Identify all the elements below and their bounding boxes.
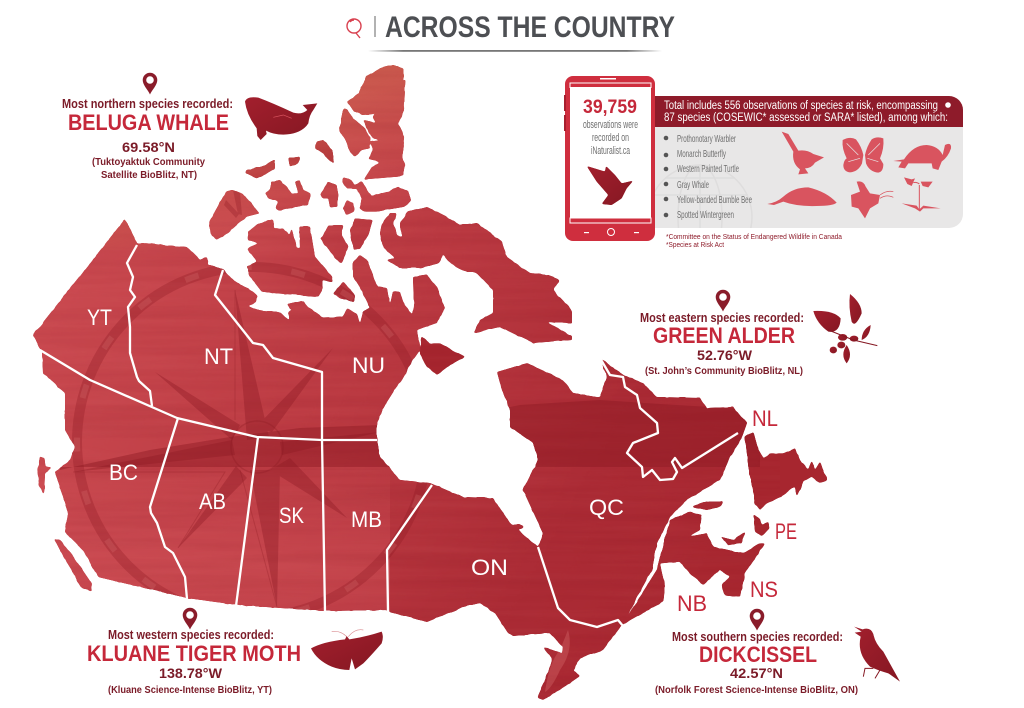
panel: species at risk: [655, 96, 963, 228]
callout: most southern species: DICKCISSEL: [699, 642, 817, 667]
province labels: [87, 305, 797, 616]
province labels: SK: [279, 503, 304, 528]
icon: location pin: [183, 608, 197, 630]
icon: bumble bee: [851, 181, 893, 218]
callout: most eastern species: (St. John’s Community BioBlitz, NL): [645, 366, 803, 377]
callout: most northern species: [62, 73, 317, 181]
callout: most eastern species: Most eastern species recorded:: [640, 310, 804, 325]
icon: monarch butterfly: [842, 137, 884, 173]
title: [347, 11, 675, 52]
province labels: ON: [471, 555, 508, 580]
callout: most northern species: BELUGA WHALE: [68, 110, 229, 135]
map of Canada: [0, 60, 827, 700]
footnotes: [666, 234, 842, 249]
callout: most southern species: [655, 609, 900, 696]
icon: turtle: [893, 144, 951, 170]
callout: most western species: [87, 608, 383, 696]
panel: phone: 39,759: [583, 97, 637, 118]
icon: warbler: [782, 132, 824, 174]
species icons: [767, 132, 951, 218]
callout: most northern species: Satellite BioBlitz, NT): [101, 170, 197, 181]
title: ACROSS THE COUNTRY: [385, 11, 675, 44]
icon: beluga whale: [245, 97, 317, 140]
globe watermark: [655, 164, 752, 228]
icon: location pin: [716, 290, 730, 312]
icon: green alder branch: [813, 294, 877, 363]
panel: phone: iNaturalist.ca: [591, 145, 631, 157]
province labels: AB: [199, 489, 226, 514]
species list: Prothonotary Warbler: [677, 133, 736, 145]
icon: wintergreen: [902, 177, 941, 212]
province labels: YT: [87, 305, 112, 330]
icon: location pin: [750, 609, 764, 630]
panel: phone: recorded on: [592, 132, 629, 144]
footnotes: *Committee on the Status of Endangered Wildlife in Canada: [666, 234, 842, 241]
lake in Baffin Island: [461, 283, 475, 301]
province labels: NT: [204, 344, 233, 369]
header bar: [655, 96, 963, 127]
panel: species at risk: Total includes 556 observations of species at risk, encompassing: [664, 100, 938, 112]
callout: most northern species: (Tuktoyaktuk Community: [92, 157, 205, 168]
callout: most northern species: Most northern species recorded:: [62, 96, 233, 111]
species list: Monarch Butterfly: [677, 148, 726, 160]
species list: Western Painted Turtle: [677, 163, 739, 175]
callout: most southern species: Most southern species recorded:: [672, 629, 843, 644]
compass ring: [77, 267, 427, 617]
province labels: NS: [750, 577, 778, 602]
icon: gray whale: [767, 187, 837, 206]
species list: Yellow-banded Bumble Bee: [677, 194, 752, 206]
Banks Island shading: [224, 190, 242, 218]
footnotes: *Species at Risk Act: [666, 242, 724, 249]
callout: most eastern species: [640, 290, 877, 377]
province labels: NU: [352, 353, 385, 378]
species list: Spotted Wintergreen: [677, 209, 734, 221]
callout: most eastern species: GREEN ALDER: [653, 323, 795, 348]
panel: phone: [564, 76, 655, 241]
species list: [664, 133, 752, 221]
icon: dickcissel bird: [854, 627, 900, 682]
icon: bird: [587, 166, 633, 205]
icon: tiger moth: [311, 630, 383, 670]
callout: most western species: KLUANE TIGER MOTH: [87, 641, 301, 666]
callout: most northern species: 69.58°N: [122, 139, 175, 155]
compass star: [73, 290, 380, 607]
province labels: MB: [351, 507, 382, 532]
callout: most western species: Most western species recorded:: [108, 627, 274, 642]
province labels: QC: [589, 495, 624, 520]
callout: most eastern species: 52.76°W: [697, 347, 753, 363]
province labels: PE: [775, 519, 797, 544]
icon: magnifier logo: [347, 19, 361, 38]
panel: species at risk: 87 species (COSEWIC* assessed or SARA* listed), among which:: [664, 112, 948, 124]
callout: most southern species: (Norfolk Forest Science-Intense BioBlitz, ON): [655, 685, 858, 696]
callout: most western species: (Kluane Science-Intense BioBlitz, YT): [108, 685, 272, 696]
provincial borders: [40, 245, 738, 627]
compass and horizon photo texture: [0, 60, 780, 692]
province labels: NB: [677, 591, 707, 616]
species list: Gray Whale: [677, 179, 709, 191]
province labels: NL: [752, 406, 778, 431]
icon: location pin: [143, 73, 157, 94]
callout: most southern species: 42.57°N: [730, 665, 783, 681]
Southern Ontario highlight: [545, 630, 570, 692]
panel: phone: observations were: [583, 119, 638, 131]
province labels: BC: [109, 460, 138, 485]
callout: most western species: 138.78°W: [159, 665, 223, 681]
